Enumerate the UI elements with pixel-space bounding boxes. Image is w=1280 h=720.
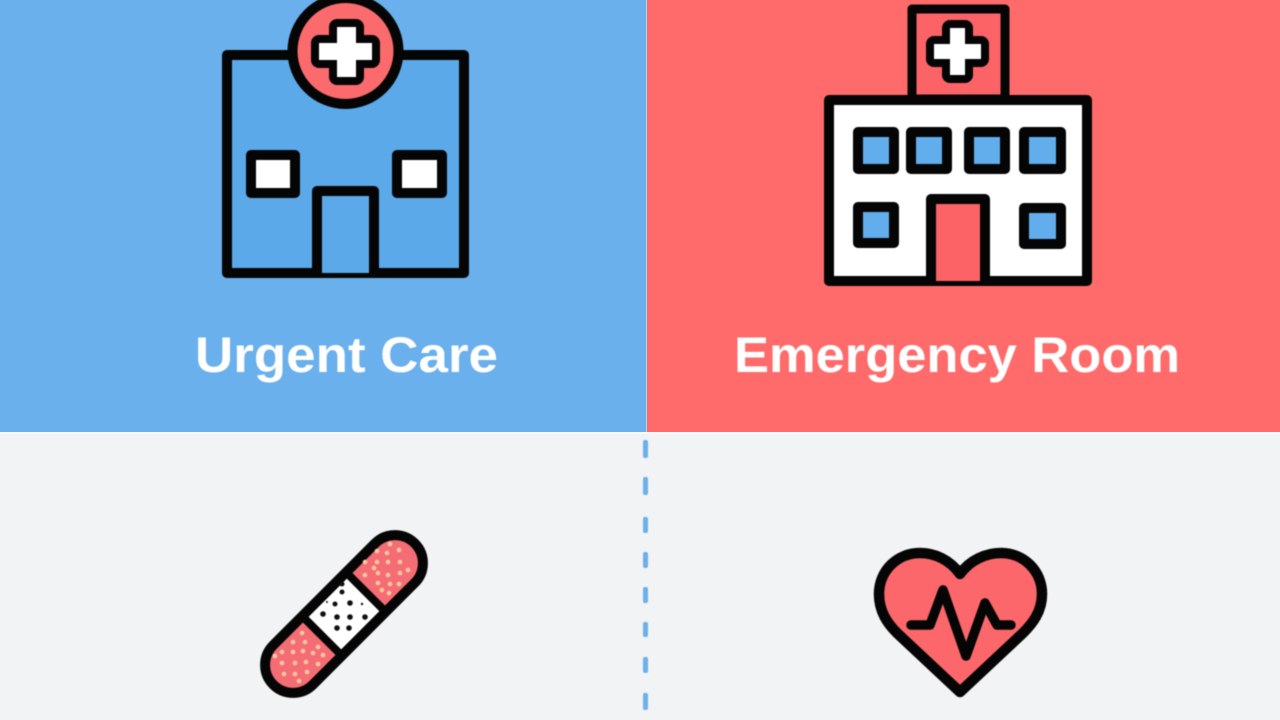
icon: heart with pulse line bbox=[879, 553, 1042, 692]
panel: urgent care header bbox=[0, 0, 646, 432]
heading: urgent care: Urgent Care bbox=[195, 327, 498, 383]
heading: emergency room: Emergency Room bbox=[734, 327, 1180, 383]
panel: emergency room header bbox=[647, 0, 1280, 432]
divider: dashed centre line bbox=[643, 440, 648, 710]
icon: emergency room building bbox=[829, 9, 1087, 281]
icon: urgent care building bbox=[227, 0, 464, 273]
icon: adhesive bandage bbox=[253, 523, 435, 705]
